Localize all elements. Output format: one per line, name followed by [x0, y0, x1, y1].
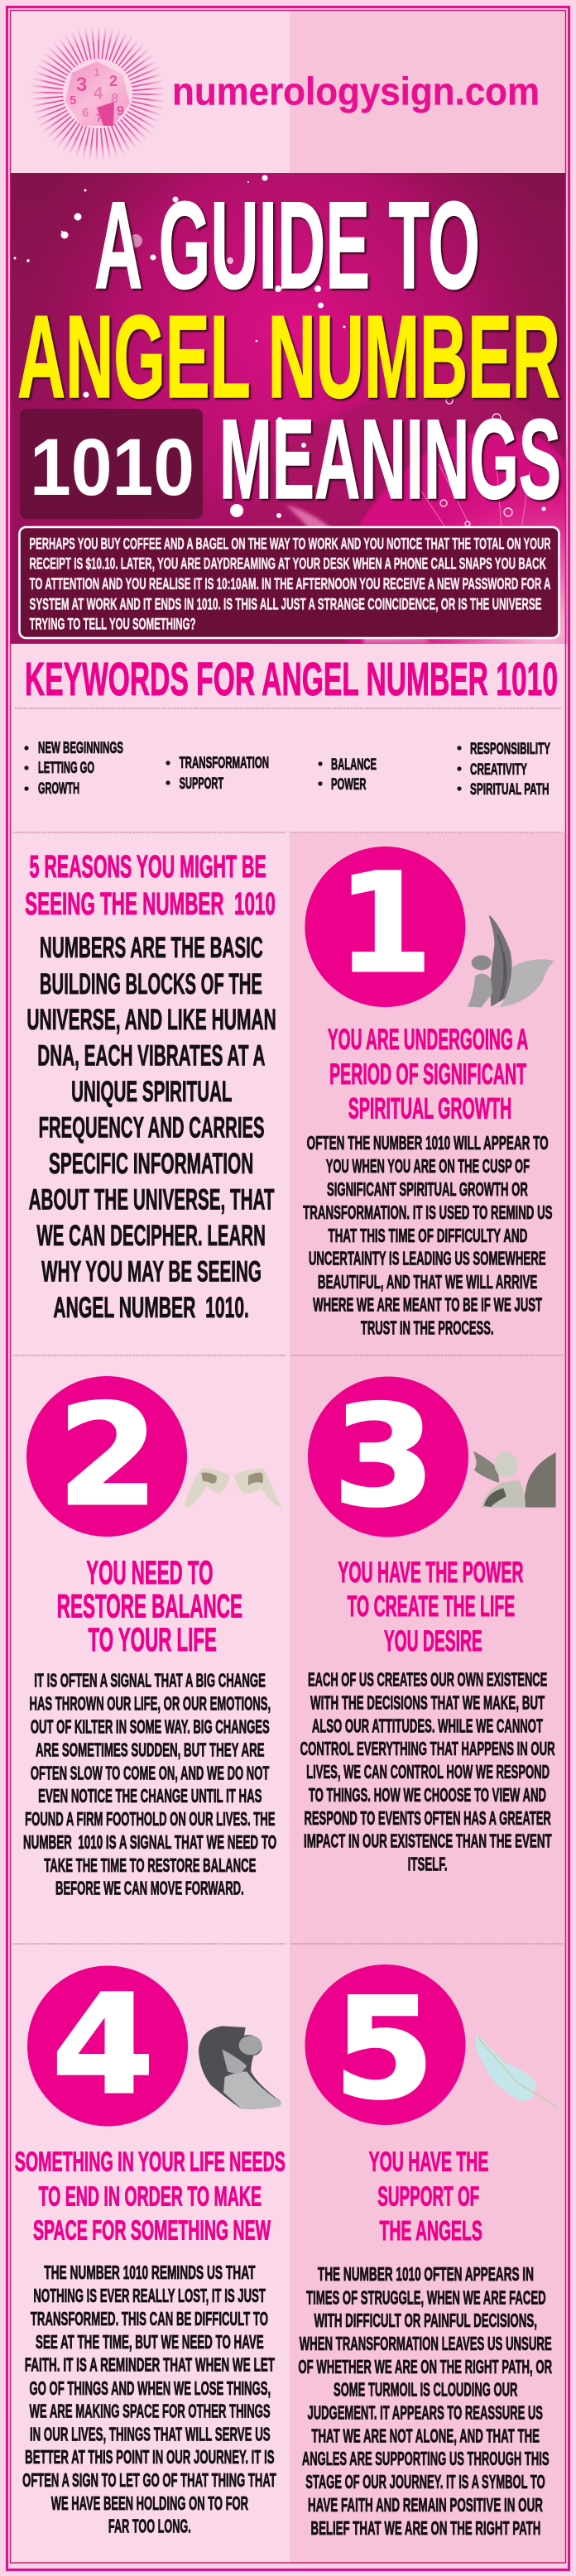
text: numbers intro paragraph: WE CAN DECIPHER. LEARN	[36, 1219, 266, 1252]
keyword list: column 3: BALANCE	[331, 756, 377, 774]
text: reason 4 body: IN OUR LIVES, THINGS THAT WILL SERVE US	[30, 2424, 271, 2445]
text: reason 1 body: SIGNIFICANT SPIRITUAL GROWTH OR	[327, 1178, 528, 1200]
heading: reason 3: TO CREATE THE LIFE	[347, 1590, 515, 1623]
text: reason 4 body: WE ARE MAKING SPACE FOR OTHER THINGS	[30, 2401, 271, 2422]
text: reason 5 body: BELIEF THAT WE ARE ON THE RIGHT PATH	[310, 2517, 540, 2539]
text: reason 3 body: IMPACT IN OUR EXISTENCE THAN THE EVENT	[304, 1830, 552, 1852]
text: reason 2 body	[23, 1670, 276, 1899]
text: reason 5 body: THE NUMBER 1010 OFTEN APPEARS IN	[318, 2264, 534, 2285]
keyword list: column 3: POWER	[331, 775, 366, 794]
heading: 5 reasons	[25, 849, 276, 922]
text: reason 4 body: GO OF THINGS AND WHEN WE LOSE THINGS,	[30, 2377, 271, 2399]
heading: reason 1: YOU ARE UNDERGOING A	[328, 1023, 528, 1056]
text: numbers intro paragraph: NUMBERS ARE THE BASIC	[40, 931, 263, 964]
icon: numerology logo: 3	[76, 74, 87, 96]
heading: reason 1: PERIOD OF SIGNIFICANT	[329, 1058, 526, 1091]
text: numbers intro paragraph: ABOUT THE UNIVERSE, THAT	[29, 1182, 275, 1216]
number badge 1: 1	[338, 844, 432, 1003]
text: numbers intro paragraph: SPECIFIC INFORMATION	[49, 1147, 253, 1180]
text: numbers intro paragraph: FREQUENCY AND CARRIES	[39, 1111, 265, 1144]
text: reason 5 body: STAGE OF OUR JOURNEY. IT IS A SYMBOL TO	[305, 2471, 545, 2492]
keyword list: column 1: LETTING GO	[38, 759, 94, 777]
text: reason 4 body: WE HAVE BEEN HOLDING ON TO FOR	[51, 2492, 248, 2514]
text: reason 2 body: TAKE THE TIME TO RESTORE BALANCE	[44, 1854, 256, 1876]
heading: reason 2: TO YOUR LIFE	[89, 1621, 217, 1658]
text: numbers intro paragraph: WHY YOU MAY BE SEEING	[41, 1254, 262, 1288]
keyword list: column 2	[166, 754, 269, 793]
text: reason 4 body: BETTER AT THIS POINT IN OUR JOURNEY. IT IS	[25, 2446, 275, 2468]
text: reason 5 body: ANGLES ARE SUPPORTING US THROUGH THIS	[302, 2448, 550, 2469]
number badge: 1010: 1010	[30, 422, 194, 512]
number badge 4	[27, 1965, 188, 2127]
text: reason 4 body: NOTHING IS EVER REALLY LOST, IT IS JUST	[33, 2285, 266, 2306]
banner bokeh dots	[13, 175, 546, 518]
icon: numerology logo	[47, 43, 148, 144]
text: reason 4 body	[22, 2262, 276, 2537]
text: reason 1 body: YOU WHEN YOU ARE ON THE CUSP OF	[326, 1155, 530, 1177]
text: reason 5 body: OF WHETHER WE ARE ON THE RIGHT PATH, OR	[298, 2356, 552, 2377]
keyword list: column 4: CREATIVITY	[470, 760, 527, 779]
number badge 3: 3	[333, 1375, 435, 1537]
heading: reason 4: TO END IN ORDER TO MAKE	[39, 2182, 262, 2212]
text: reason 2 body: ARE SOMETIMES SUDDEN, BUT THEY ARE	[36, 1739, 265, 1761]
heading: reason 5: THE ANGELS	[379, 2217, 482, 2247]
banner: title artwork	[11, 173, 565, 644]
text: reason 5 body	[298, 2264, 552, 2539]
icon: sleeping angel statue	[199, 2026, 281, 2109]
banner swirl	[248, 389, 565, 644]
icon: numerology logo: 2	[109, 73, 118, 89]
heading: reason 5: SUPPORT OF	[377, 2182, 479, 2212]
heading: reason 5	[369, 2147, 488, 2247]
heading: reason 2	[57, 1554, 242, 1658]
panel: 5 reasons intro	[25, 849, 276, 1324]
keyword list: column 2: SUPPORT	[180, 775, 223, 793]
heading: reason 4: SPACE FOR SOMETHING NEW	[33, 2216, 271, 2246]
banner ring bubbles	[440, 397, 512, 526]
text: reason 2 body: HAS THROWN OUR LIFE, OR OUR EMOTIONS,	[30, 1693, 271, 1715]
heading: 5 reasons: 5 REASONS YOU MIGHT BE	[30, 849, 266, 885]
text: reason 2 body: OUT OF KILTER IN SOME WAY. BIG CHANGES	[31, 1716, 270, 1738]
text: numbers intro paragraph: ANGEL NUMBER 1010.	[53, 1291, 249, 1324]
icon: numerology logo: 1	[94, 65, 100, 79]
text: reason 1 body: TRANSFORMATION. IT IS USED TO REMIND US	[303, 1202, 553, 1223]
heading: reason 2: RESTORE BALANCE	[57, 1587, 242, 1625]
heading: reason 4: SOMETHING IN YOUR LIFE NEEDS	[15, 2147, 286, 2177]
keyword list: column 2: TRANSFORMATION	[180, 754, 269, 772]
icon: numerology logo: 5	[70, 94, 76, 108]
intro text panel	[20, 527, 559, 638]
icon: pale blue feather	[476, 2034, 557, 2107]
text: reason 4 body: FAR TOO LONG.	[108, 2516, 191, 2537]
text: reason 3 body: WITH THE DECISIONS THAT WE MAKE, BUT	[310, 1692, 545, 1714]
text: reason 2 body: OFTEN SLOW TO COME ON, AND WE DO NOT	[31, 1763, 269, 1784]
text: reason 3 body: ALSO OUR ATTITUDES. WHILE WE CANNOT	[312, 1715, 543, 1737]
text: reason 4 body: OFTEN A SIGN TO LET GO OF THAT THING THAT	[22, 2469, 276, 2491]
text: reason 4 body: FAITH. IT IS A REMINDER THAT WHEN WE LET	[25, 2354, 275, 2376]
text: reason 3 body	[300, 1669, 555, 1874]
panel: reason 3	[300, 1375, 556, 1874]
text: reason 3 body: ITSELF.	[408, 1854, 448, 1874]
text: numbers intro paragraph: DNA, EACH VIBRATES AT A	[37, 1039, 266, 1072]
heading: reason 3: YOU HAVE THE POWER	[338, 1555, 523, 1589]
text: reason 1 body: UNCERTAINTY IS LEADING US SOMEWHERE	[309, 1248, 546, 1269]
panel: keywords (full-width background)	[11, 644, 565, 833]
panel: reason 4	[15, 1965, 286, 2537]
panel: reason 2	[23, 1374, 282, 1899]
number badge 5: 5	[334, 1968, 434, 2130]
heading: reason 5: YOU HAVE THE	[369, 2147, 488, 2177]
text: reason 5 body: WHEN TRANSFORMATION LEAVES US UNSURE	[300, 2333, 552, 2354]
heading: reason 1	[328, 1023, 528, 1125]
left column background	[11, 11, 290, 2563]
icon: pair of wings	[185, 1468, 282, 1508]
text: reason 1 body: TRUST IN THE PROCESS.	[361, 1317, 494, 1339]
heading: reason 4	[15, 2147, 286, 2246]
text: reason 5 body: HAVE FAITH AND REMAIN POSITIVE IN OUR	[308, 2494, 543, 2516]
panel: reason 5	[298, 1964, 557, 2539]
heading: 5 reasons: SEEING THE NUMBER 1010	[25, 886, 276, 922]
text: reason 5 body: SOME TURMOIL IS CLOUDING OUR	[334, 2379, 517, 2401]
text: reason 3 body: LIVES, WE CAN CONTROL HOW WE RESPOND	[306, 1761, 550, 1782]
right column background	[290, 11, 565, 2563]
heading: reason 3: YOU DESIRE	[384, 1624, 482, 1657]
number badge 3	[308, 1375, 468, 1537]
number badge 5	[305, 1964, 465, 2130]
text: reason 4 body: TRANSFORMED. THIS CAN BE DIFFICULT TO	[31, 2308, 268, 2329]
text: reason 5 body: TIMES OF STRUGGLE, WHEN WE ARE FACED	[306, 2287, 546, 2308]
text: numbers intro paragraph: BUILDING BLOCKS OF THE	[40, 967, 262, 1000]
number badge 2: 2	[58, 1374, 159, 1537]
icon: numerology logo: 9	[117, 104, 124, 118]
heading: reason 2: YOU NEED TO	[86, 1554, 213, 1591]
site name: numerologysign.com	[172, 70, 540, 113]
text: reason 3 body: EACH OF US CREATES OUR OWN EXISTENCE	[308, 1669, 547, 1691]
text: reason 5 body: WITH DIFFICULT OR PAINFUL DECISIONS,	[314, 2310, 537, 2331]
text: reason 1 body: BEAUTIFUL, AND THAT WE WILL ARRIVE	[318, 1271, 538, 1293]
text: reason 2 body: NUMBER 1010 IS A SIGNAL THAT WE NEED TO	[23, 1831, 276, 1853]
panel: reason 1	[303, 844, 554, 1339]
text: reason 1 body: OFTEN THE NUMBER 1010 WILL APPEAR TO	[307, 1132, 549, 1154]
keyword list: column 1: NEW BEGINNINGS	[38, 739, 123, 757]
text: reason 2 body: IT IS OFTEN A SIGNAL THAT A BIG CHANGE	[34, 1670, 266, 1691]
keyword list: column 1: GROWTH	[38, 780, 79, 798]
text: reason 3 body: CONTROL EVERYTHING THAT HAPPENS IN OUR	[300, 1738, 555, 1759]
heading: reason 1: SPIRITUAL GROWTH	[348, 1091, 511, 1125]
number badge 2	[26, 1374, 187, 1537]
keyword list: column 3	[318, 756, 377, 794]
text: reason 5 body: JUDGEMENT. IT APPEARS TO REASSURE US	[308, 2402, 543, 2423]
icon: numerology logo: 6	[82, 106, 89, 120]
keyword list: column 4	[457, 740, 550, 799]
intro text panel: TRYING TO TELL YOU SOMETHING?	[30, 616, 195, 634]
header: logo and site name	[47, 43, 540, 144]
text: numbers intro paragraph: UNIVERSE, AND LIKE HUMAN	[26, 1003, 276, 1036]
text: reason 1 body: WHERE WE ARE MEANT TO BE IF WE JUST	[313, 1294, 542, 1316]
icon: angel statue covering face	[473, 1451, 556, 1508]
text: reason 3 body: TO THINGS. HOW WE CHOOSE TO VIEW AND	[309, 1784, 546, 1806]
text: numbers intro paragraph: UNIQUE SPIRITUAL	[71, 1075, 233, 1108]
icon: angel statue with wings	[468, 915, 554, 1007]
text: reason 2 body: FOUND A FIRM FOOTHOLD ON OUR LIVES. THE	[25, 1808, 276, 1830]
text: reason 4 body: SEE AT THE TIME, BUT WE NEED TO HAVE	[36, 2331, 264, 2353]
text: reason 2 body: BEFORE WE CAN MOVE FORWARD.	[55, 1878, 244, 1899]
text: reason 1 body: THAT THIS TIME OF DIFFICULTY AND	[328, 1225, 527, 1246]
icon: numerology logo: 7	[96, 112, 102, 124]
number badge 1	[305, 844, 465, 1007]
heading: reason 3	[338, 1555, 523, 1657]
text: reason 1 body	[303, 1132, 553, 1339]
icon: numerology logo: 4	[94, 84, 103, 103]
icon: numerology logo: 8	[111, 92, 118, 106]
text: reason 4 body: THE NUMBER 1010 REMINDS US THAT	[44, 2262, 256, 2283]
number badge 4: 4	[51, 1965, 154, 2124]
text: reason 5 body: THAT WE ARE NOT ALONE, AND THAT THE	[311, 2425, 540, 2447]
text: numbers intro paragraph	[26, 931, 276, 1324]
keyword list: column 1	[24, 739, 123, 798]
text: reason 3 body: RESPOND TO EVENTS OFTEN HAS A GREATER	[305, 1807, 551, 1829]
text: reason 2 body: EVEN NOTICE THE CHANGE UNTIL IT HAS	[38, 1785, 262, 1806]
